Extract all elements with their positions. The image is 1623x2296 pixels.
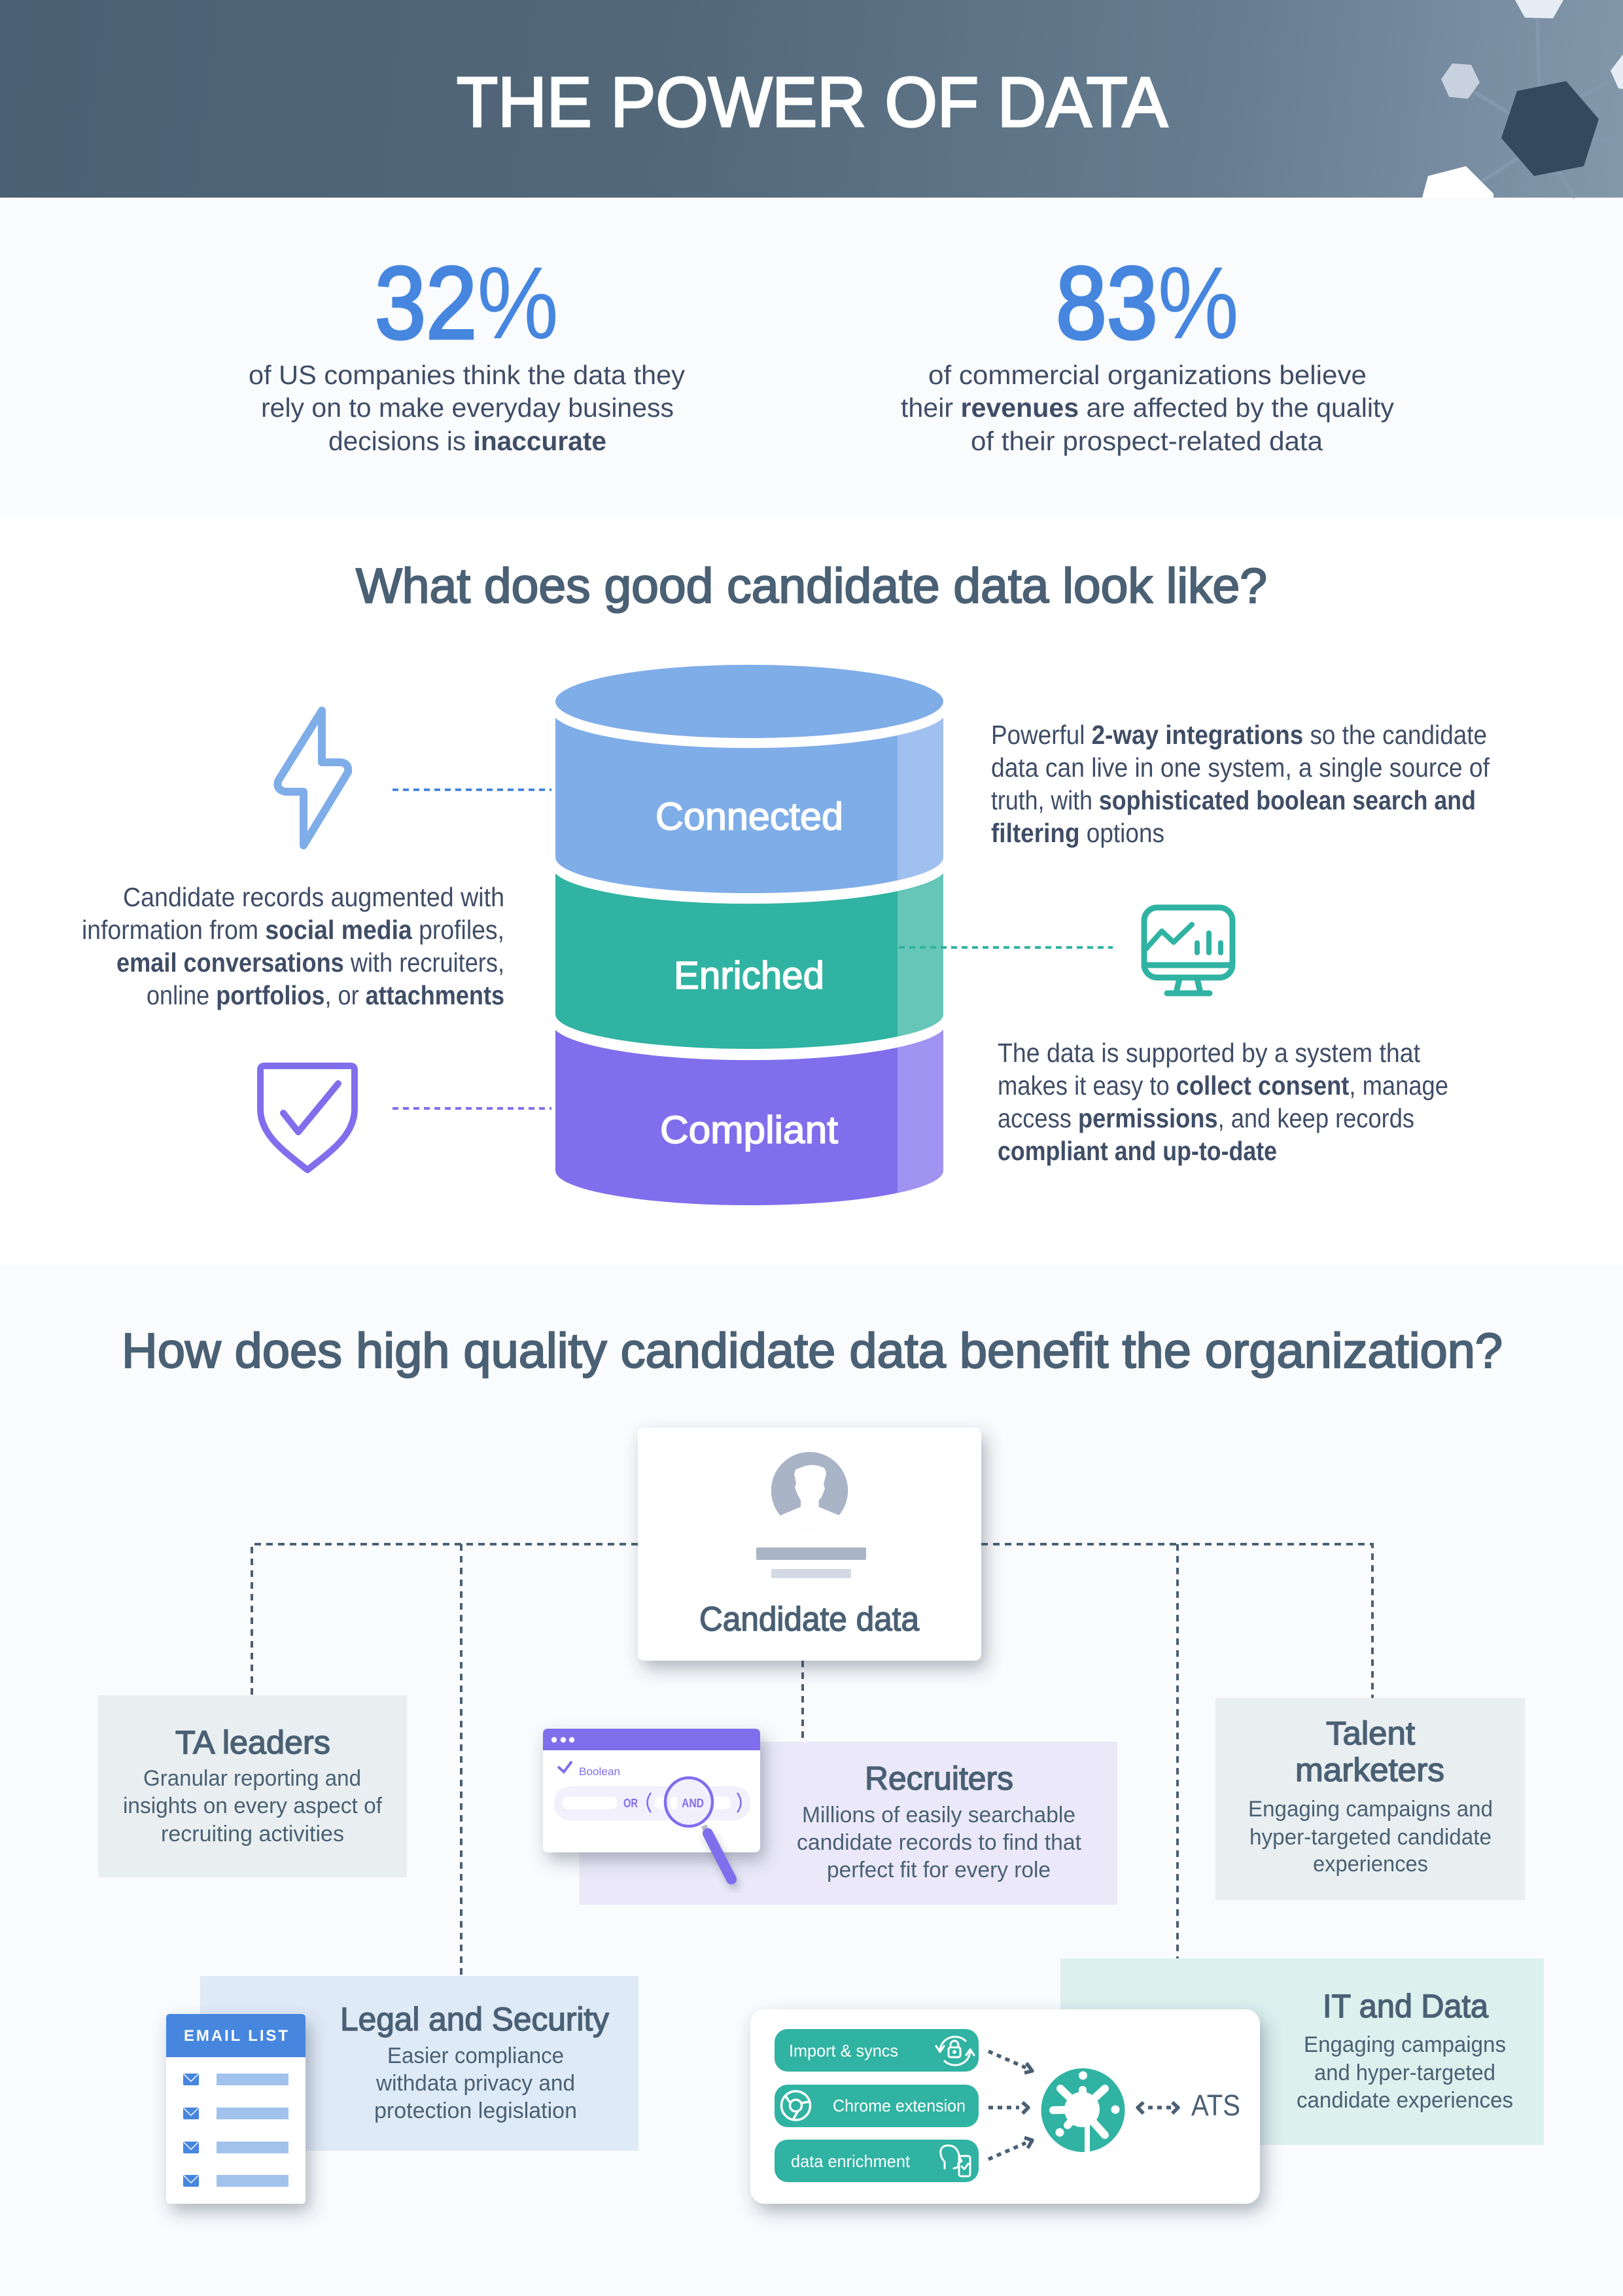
cylinder layer: connected xyxy=(555,713,943,896)
stat description: their revenues are affected by the quality xyxy=(901,393,1394,423)
stat number: 83% xyxy=(1056,246,1239,361)
text: enriched description: email conversations with recruiters, xyxy=(116,947,504,978)
card label: Candidate data xyxy=(699,1600,919,1638)
panel: legal and security: Easier compliance xyxy=(387,2043,564,2068)
panel: TA leaders: insights on every aspect of xyxy=(123,1793,383,1818)
panel: legal and security: Legal and Security xyxy=(340,2001,609,2038)
icon: monitor chart xyxy=(1144,908,1232,993)
icon: lightning bolt xyxy=(277,711,348,845)
illustration: boolean search window: Boolean xyxy=(579,1765,620,1778)
connector: dashed tree lines xyxy=(252,1544,1372,1975)
text: connected description: filtering options xyxy=(991,818,1164,848)
illustration: email list card xyxy=(166,2014,305,2204)
panel: recruiters: candidate records to find that xyxy=(797,1830,1082,1855)
heading: how does candidate data benefit the organization: How does high quality candidate data benefit the organization? xyxy=(122,1323,1503,1378)
illustration: boolean search window xyxy=(543,1729,760,1879)
panel: recruiters: perfect fit for every role xyxy=(827,1858,1051,1882)
text: compliant description: compliant and up-to-date xyxy=(998,1136,1277,1166)
stat description: of US companies think the data they xyxy=(249,360,685,390)
header banner xyxy=(0,0,1623,198)
pill: import and syncs: Import & syncs xyxy=(789,2041,898,2060)
text: compliant description: makes it easy to collect consent, manage xyxy=(998,1070,1448,1101)
text: compliant description xyxy=(998,1038,1448,1166)
panel: TA leaders: Granular reporting and xyxy=(143,1766,361,1791)
stat description: decisions is inaccurate xyxy=(328,426,606,456)
panel: IT and data xyxy=(1060,1958,1544,2145)
arrows to ATS hub xyxy=(988,2051,1178,2159)
icon: hexagon network xyxy=(1422,0,1623,198)
panel: talent marketers: experiences xyxy=(1313,1852,1428,1877)
stat description: of their prospect-related data xyxy=(971,426,1323,456)
text: connected description: data can live in one system, a single source of xyxy=(991,752,1490,783)
panel: legal and security: withdata privacy and xyxy=(375,2071,575,2096)
icon: shield check xyxy=(260,1066,355,1170)
stat description: rely on to make everyday business xyxy=(261,393,674,423)
section background: good candidate data xyxy=(0,516,1623,1265)
section background: benefits xyxy=(0,1265,1623,2296)
text: connected description xyxy=(991,720,1490,848)
title: THE POWER OF DATA xyxy=(457,62,1168,141)
pill: data enrichment: data enrichment xyxy=(791,2151,911,2171)
panel: IT and data: candidate experiences xyxy=(1297,2088,1513,2113)
section background: statistics xyxy=(0,198,1623,516)
connector: teal dashed line xyxy=(899,946,1113,949)
database cylinder xyxy=(555,665,943,1210)
heading: what does good candidate data look like: What does good candidate data look like? xyxy=(356,558,1267,613)
icon: hub logo xyxy=(1041,2068,1125,2154)
cylinder layer: compliant xyxy=(555,1027,943,1210)
card: candidate data xyxy=(638,1428,981,1661)
panel: TA leaders: TA leaders xyxy=(175,1724,330,1761)
text: enriched description xyxy=(82,882,504,1010)
stat description xyxy=(249,360,685,456)
panel: talent marketers: hyper-targeted candidate xyxy=(1249,1825,1492,1850)
icon: magnifying glass xyxy=(665,1778,731,1879)
stat number: 32% xyxy=(375,246,559,361)
cylinder top xyxy=(555,665,943,738)
text: compliant description: The data is supported by a system that xyxy=(998,1038,1421,1068)
text: connected description: truth, with sophisticated boolean search and xyxy=(991,785,1476,815)
illustration: boolean search window: OR xyxy=(623,1797,638,1810)
panel: talent marketers: Engaging campaigns and xyxy=(1248,1797,1493,1822)
cylinder layer: enriched: Enriched xyxy=(674,954,824,997)
panel: legal and security xyxy=(200,1976,638,2151)
illustration: ATS integration card xyxy=(750,2009,1260,2204)
pill: chrome extension: Chrome extension xyxy=(833,2096,966,2115)
illustration: email list card: EMAIL LIST xyxy=(184,2027,288,2045)
panel: talent marketers xyxy=(1215,1698,1525,1900)
stat: 83 percent xyxy=(901,246,1394,456)
panel: talent marketers: marketers xyxy=(1295,1752,1444,1788)
text: compliant description: access permissions, and keep records xyxy=(998,1103,1414,1133)
panel: IT and data: Engaging campaigns xyxy=(1304,2032,1506,2057)
panel: recruiters xyxy=(580,1742,1117,1905)
text: connected description: Powerful 2-way integrations so the candidate xyxy=(991,720,1487,750)
stat description xyxy=(901,360,1394,456)
cylinder layer: enriched xyxy=(555,870,943,1053)
stat: 32 percent xyxy=(249,246,685,456)
panel: talent marketers: Talent xyxy=(1326,1715,1415,1752)
pill: data enrichment xyxy=(775,2140,979,2182)
label: ATS: ATS xyxy=(1191,2089,1240,2122)
pill: chrome extension xyxy=(775,2085,979,2127)
text: enriched description: online portfolios, or attachments xyxy=(147,980,504,1010)
text: enriched description: Candidate records augmented with xyxy=(123,882,504,912)
text: enriched description: information from social media profiles, xyxy=(82,915,504,945)
cylinder layer: compliant: Compliant xyxy=(660,1108,838,1152)
icon: candidate avatar xyxy=(771,1452,848,1529)
connector: blue dashed line xyxy=(393,788,551,791)
panel: recruiters: Recruiters xyxy=(865,1760,1013,1797)
panel: TA leaders xyxy=(98,1695,407,1877)
panel: TA leaders: recruiting activities xyxy=(161,1822,344,1846)
stat description: of commercial organizations believe xyxy=(928,360,1367,390)
placeholder name bars xyxy=(756,1547,866,1578)
icon: magnifying glass: AND xyxy=(682,1797,704,1810)
cylinder layer: connected: Connected xyxy=(655,795,843,838)
panel: recruiters: Millions of easily searchable xyxy=(802,1803,1075,1828)
pill: import and syncs xyxy=(775,2029,979,2072)
panel: legal and security: protection legislation xyxy=(374,2098,577,2123)
panel: IT and data: IT and Data xyxy=(1323,1988,1488,2024)
connector: purple dashed line xyxy=(393,1107,551,1110)
panel: IT and data: and hyper-targeted xyxy=(1314,2060,1495,2085)
